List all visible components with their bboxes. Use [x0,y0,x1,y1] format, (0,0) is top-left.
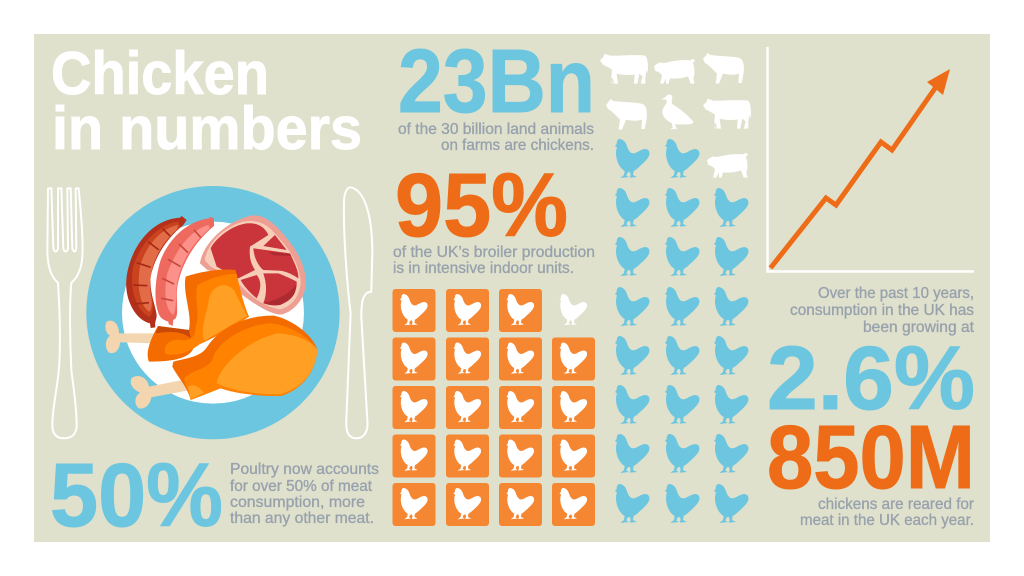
pictogram: 95% tile grid [392,289,595,526]
icon: light sausage [155,217,214,326]
text: broiler production: of the UK’s broiler production [393,244,595,261]
text: poultry share: for over 50% of meat [230,478,373,495]
text: consumption growth [790,285,975,336]
text: poultry share: consumption, more [230,494,365,511]
text: broiler production: is in intensive indoor units. [393,260,574,277]
text: consumption growth: Over the past 10 years, [818,285,974,302]
text: chickens reared: chickens are reared for [818,496,975,513]
illustration: plate of meat with cutlery [47,186,372,439]
text: broiler production [393,244,595,277]
title [51,40,362,162]
title: Chicken [51,40,269,107]
icon: upper drumstick [148,270,249,362]
stat: 95%: 95% [395,156,568,256]
icon: steak [200,215,306,315]
text: land animals [398,121,594,154]
pictogram: other farm animals [600,53,751,178]
stat: 2.6%: 2.6% [767,329,975,429]
stat: 50%: 50% [50,446,223,546]
stat: 23Bn: 23Bn [398,32,595,132]
icon: knife [344,187,372,438]
icon: lower bone [131,376,191,409]
stat: 850M: 850M [767,408,975,508]
text: consumption growth: been growing at [863,319,975,336]
text: poultry share [230,461,379,527]
title: in numbers [52,95,362,162]
arrow: growth line [770,69,950,268]
icon: upper bone [105,321,157,353]
line chart: consumption growth [768,47,974,272]
text: land animals: on farms are chickens. [441,137,594,154]
text: poultry share: Poultry now accounts [230,461,379,478]
text: poultry share: than any other meat. [230,510,374,527]
pictogram: blue chickens [615,139,748,523]
text: chickens reared: meat in the UK each year. [800,512,974,529]
text: chickens reared [800,496,975,529]
icon: fork [47,188,83,438]
text: consumption growth: consumption in the UK has [790,302,974,319]
icon: dark sausage [126,216,187,328]
text: land animals: of the 30 billion land animals [398,121,594,138]
plate [86,186,340,439]
icon: lower drumstick [172,316,317,400]
